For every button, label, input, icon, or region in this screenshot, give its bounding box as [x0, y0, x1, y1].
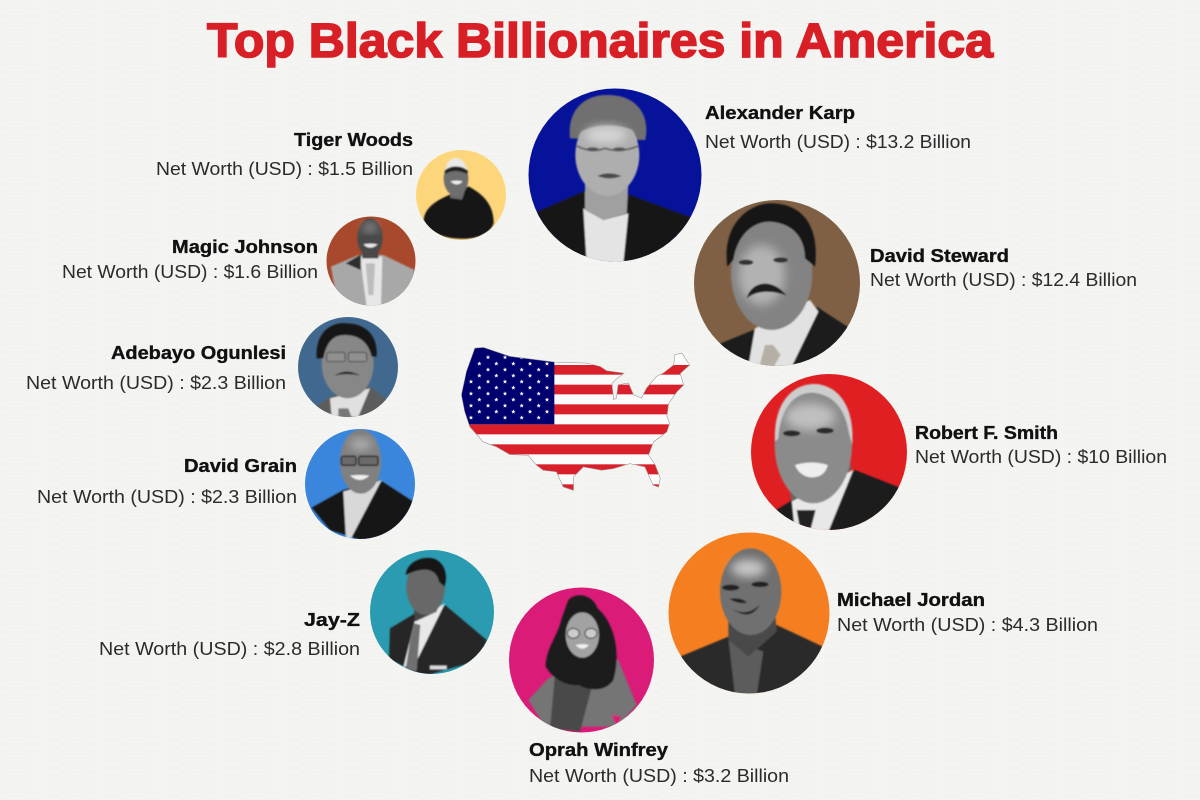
label: Robert F. Smith: Robert F. Smith	[915, 423, 1058, 443]
label: Adebayo Ogunlesi	[26, 343, 286, 393]
label: Jay-Z: Jay-Z	[304, 610, 360, 630]
label: Alexander Karp: Alexander Karp	[705, 103, 855, 123]
label: Oprah Winfrey: Oprah Winfrey	[529, 740, 668, 760]
portrait: Adebayo Ogunlesi	[295, 315, 400, 420]
label: Adebayo Ogunlesi: Adebayo Ogunlesi	[111, 343, 286, 363]
portrait: Robert F. Smith	[751, 374, 907, 530]
title: Top Black Billionaires in America	[207, 15, 993, 68]
label: Adebayo Ogunlesi: Net Worth (USD) : $2.3 Billion	[26, 372, 286, 393]
label: David Steward	[870, 246, 1137, 290]
label: Jay-Z: Net Worth (USD) : $2.8 Billion	[99, 638, 360, 659]
label: Oprah Winfrey: Net Worth (USD) : $3.2 Billion	[529, 765, 789, 786]
portrait: Magic Johnson	[326, 216, 416, 306]
map: USA flag	[461, 347, 690, 491]
label: Michael Jordan: Net Worth (USD) : $4.3 Billion	[837, 614, 1098, 635]
label: Alexander Karp: Net Worth (USD) : $13.2 Billion	[705, 131, 971, 152]
label: Michael Jordan: Michael Jordan	[837, 590, 985, 610]
portrait: Alexander Karp	[528, 88, 702, 262]
portrait: David Grain	[305, 429, 415, 539]
label: Alexander Karp	[705, 103, 971, 152]
label: David Grain: Net Worth (USD) : $2.3 Billion	[37, 486, 297, 507]
label: David Grain	[37, 456, 297, 507]
label: Michael Jordan	[837, 590, 1098, 635]
portrait: David Steward	[694, 200, 860, 366]
label: Tiger Woods: Net Worth (USD) : $1.5 Billion	[156, 158, 413, 179]
label: David Steward: David Steward	[870, 246, 1009, 266]
label: Jay-Z	[99, 610, 360, 659]
label: Tiger Woods: Tiger Woods	[294, 130, 413, 150]
label: Magic Johnson	[62, 237, 318, 282]
portrait: Oprah Winfrey	[505, 585, 655, 735]
portrait: Jay-Z	[370, 550, 494, 674]
label: David Steward: Net Worth (USD) : $12.4 Billion	[870, 269, 1137, 290]
label: Tiger Woods	[156, 130, 413, 179]
label: Magic Johnson: Magic Johnson	[172, 237, 318, 257]
portrait: Tiger Woods	[416, 150, 506, 240]
label: David Grain: David Grain	[184, 456, 297, 476]
label: Robert F. Smith	[915, 423, 1167, 467]
label: Magic Johnson: Net Worth (USD) : $1.6 Billion	[62, 261, 318, 282]
label: Robert F. Smith: Net Worth (USD) : $10 Billion	[915, 446, 1167, 467]
portrait: Michael Jordan	[668, 532, 830, 694]
label: Oprah Winfrey	[529, 740, 789, 786]
